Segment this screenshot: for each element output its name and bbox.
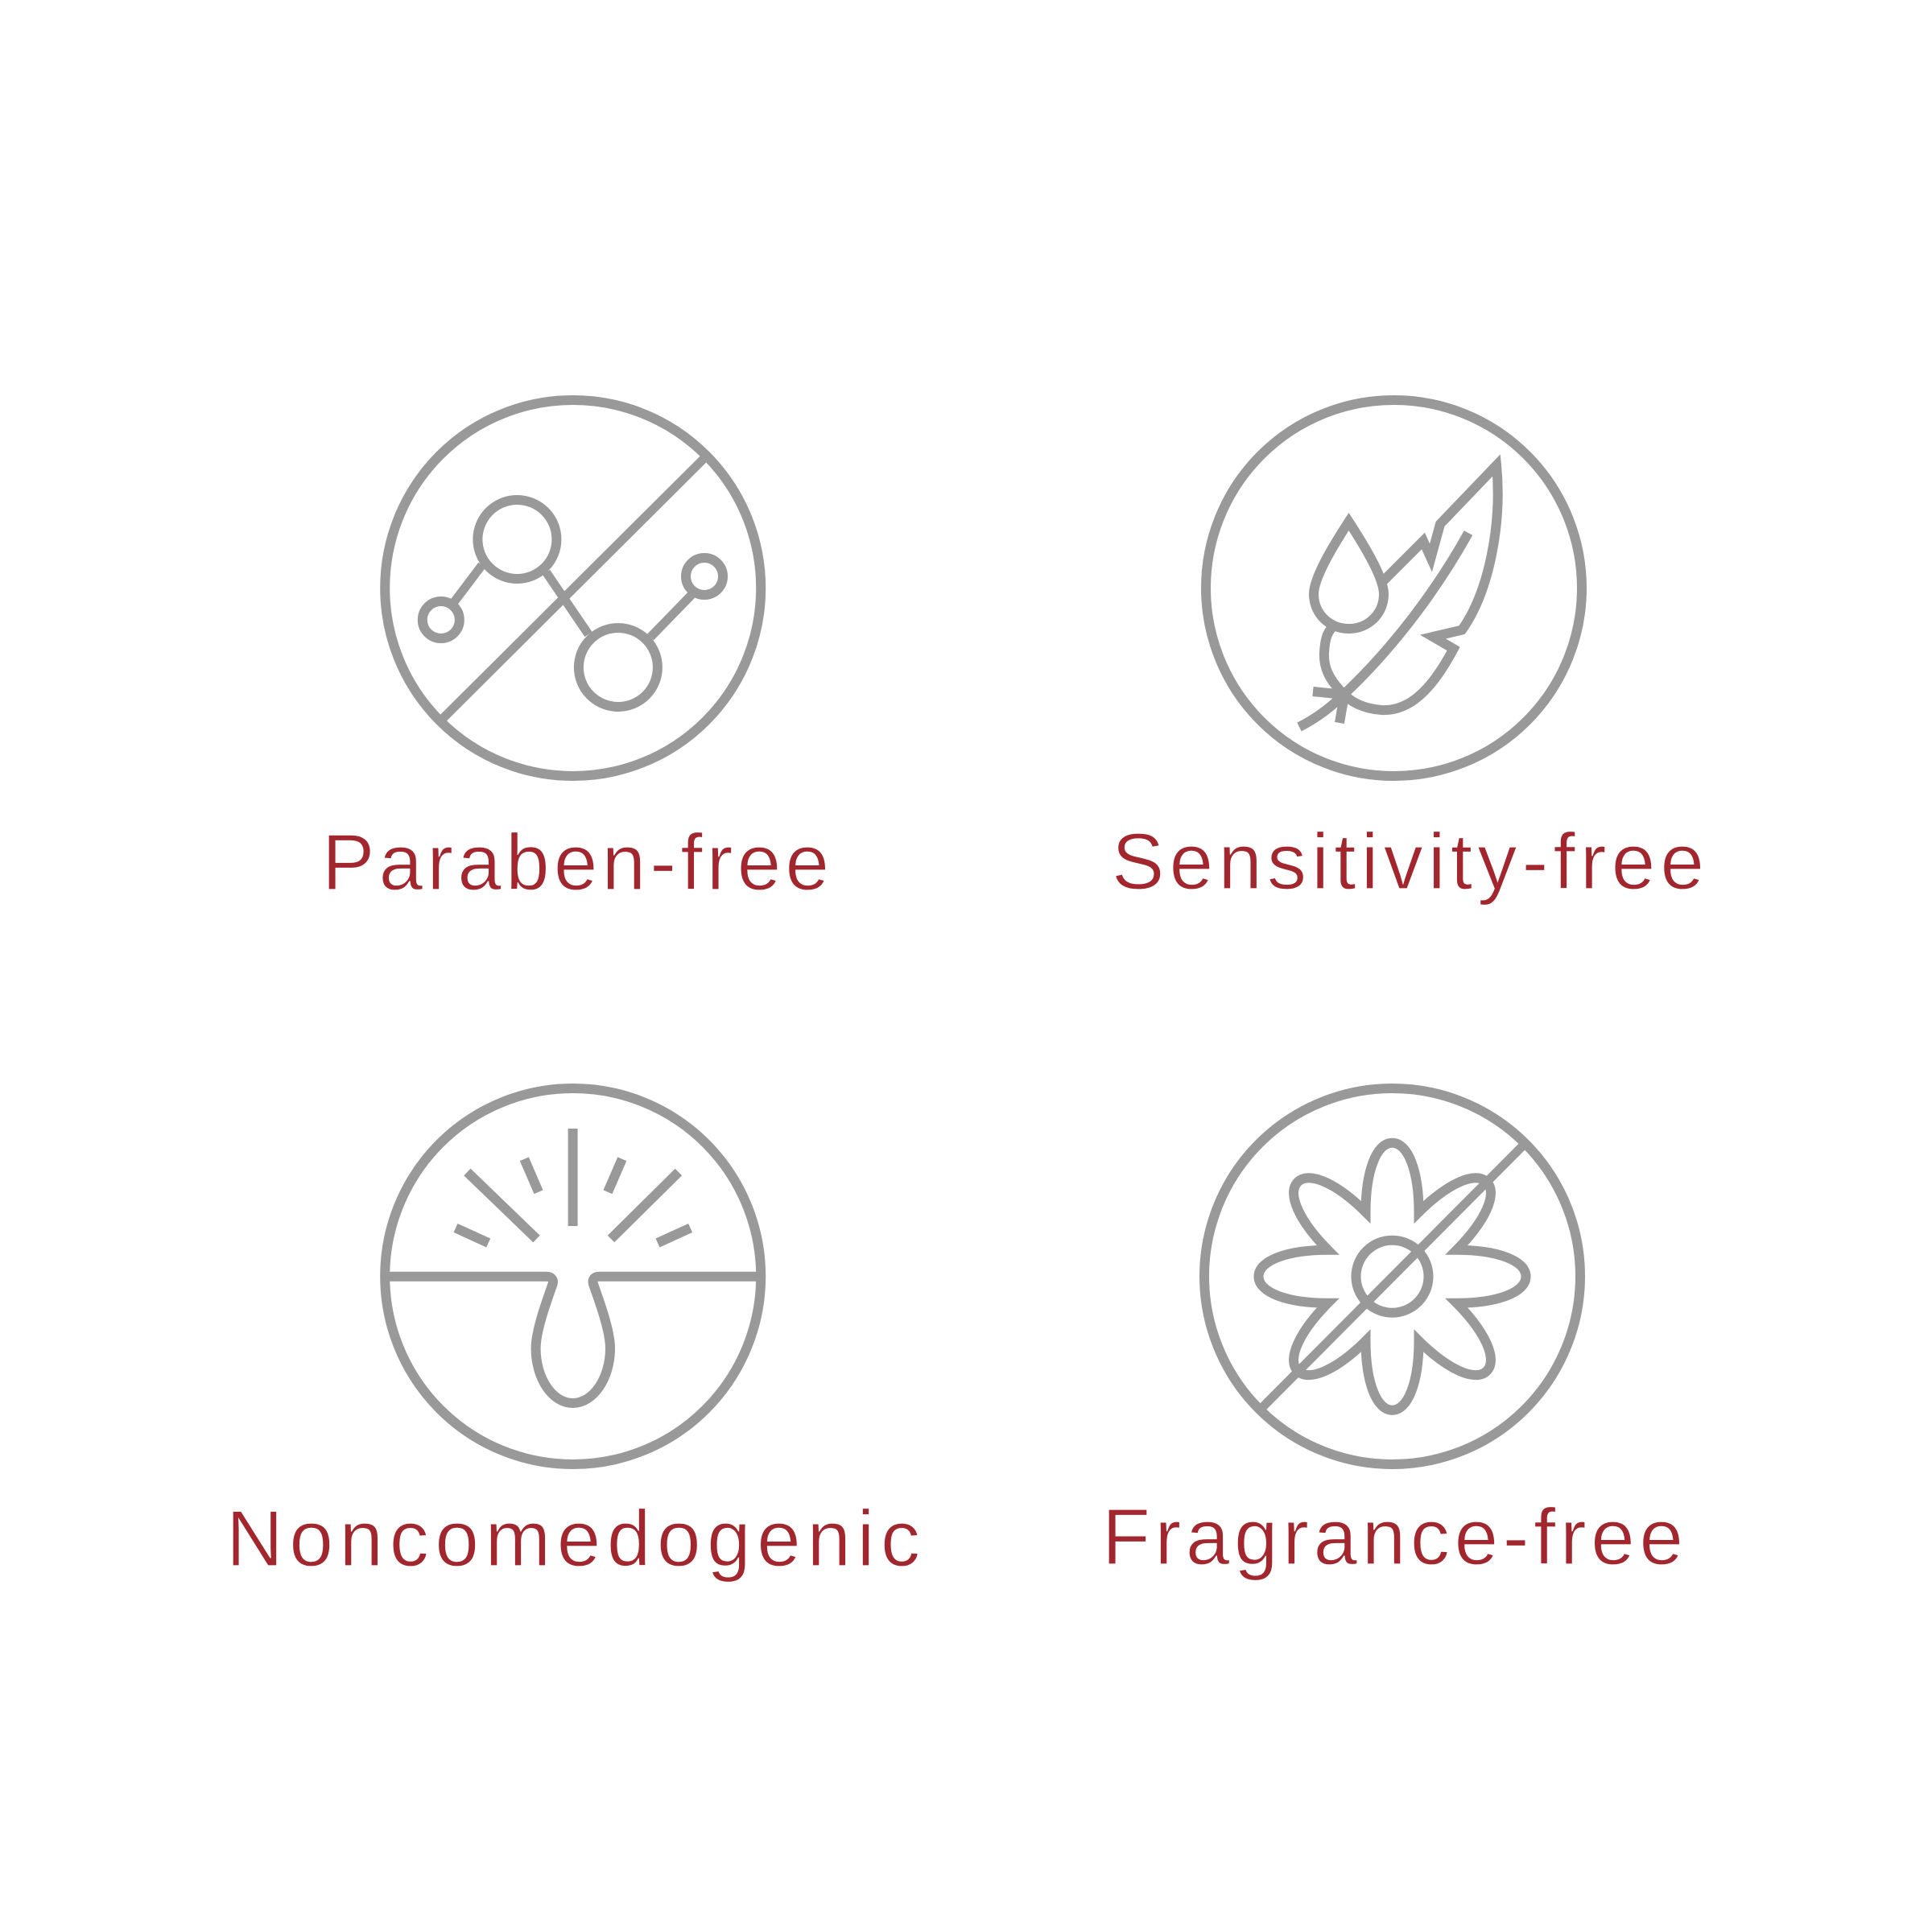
- label: Fragrance-free: Fragrance-free: [1102, 1492, 1683, 1581]
- panel: Fragrance-free: [1102, 1088, 1683, 1581]
- label: Paraben-free: Paraben-free: [322, 818, 829, 906]
- panel: Sensitivity-free: [1112, 400, 1704, 906]
- icon: feather and drop: [1206, 400, 1582, 776]
- icon: crossed-out molecule: [385, 400, 761, 776]
- panel: Paraben-free: [322, 400, 829, 906]
- icon: clogged pore with rays: [385, 1088, 761, 1464]
- panel: Noncomedogenic: [226, 1088, 920, 1583]
- label: Noncomedogenic: Noncomedogenic: [226, 1494, 920, 1583]
- icon: crossed-out flower: [1204, 1088, 1580, 1464]
- label: Sensitivity-free: Sensitivity-free: [1112, 817, 1704, 906]
